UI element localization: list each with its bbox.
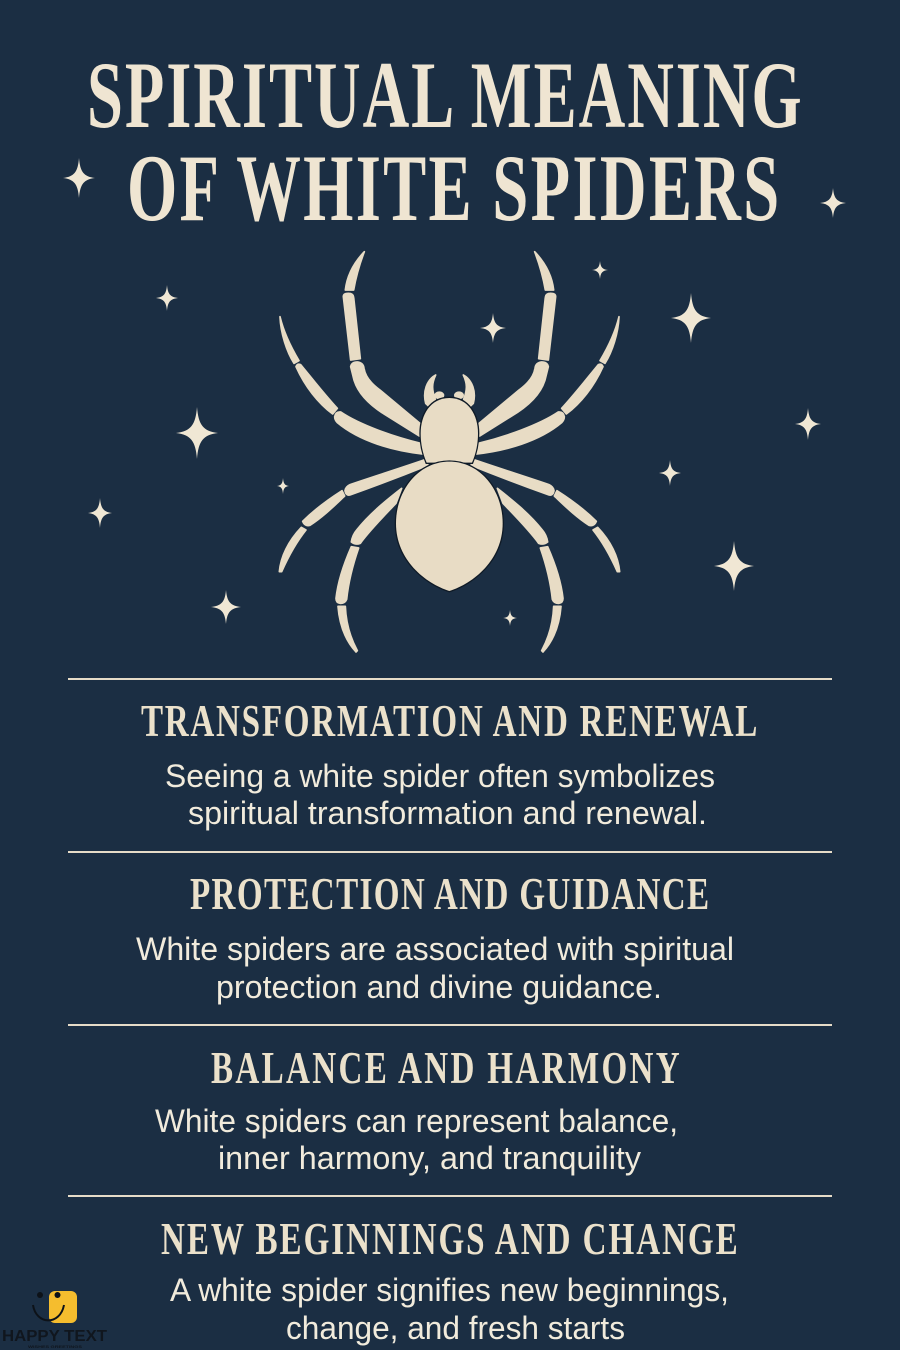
icon: sparkle stars [63,158,846,626]
section: new beginnings and change: change, and fresh starts [286,1310,625,1346]
section: balance and harmony: BALANCE AND HARMONY [211,1042,680,1093]
section: transformation and renewal [68,678,832,831]
logo: happy text: HAPPY TEXT [2,1328,107,1345]
section: balance and harmony: inner harmony, and tranquility [218,1140,641,1176]
title [87,43,802,241]
section: protection and guidance: protection and divine guidance. [216,969,662,1005]
section: protection and guidance [68,851,832,1005]
section: balance and harmony [68,1024,832,1176]
section: new beginnings and change [68,1195,832,1346]
logo: happy text [2,1291,107,1349]
section: new beginnings and change: NEW BEGINNINGS AND CHANGE [161,1213,738,1264]
section: protection and guidance: White spiders are associated with spiritual [136,931,734,967]
icon: white spider [279,252,620,652]
section: transformation and renewal: Seeing a white spider often symbolizes [165,758,715,794]
section: balance and harmony: White spiders can represent balance, [155,1103,678,1139]
logo: happy text: WISHES GREETINGS [28,1344,82,1349]
section: transformation and renewal: TRANSFORMATION AND RENEWAL [141,695,757,746]
section: protection and guidance: PROTECTION AND GUIDANCE [190,868,709,919]
title: SPIRITUAL MEANING [87,43,802,148]
section: transformation and renewal: spiritual transformation and renewal. [188,795,707,831]
title: OF WHITE SPIDERS [127,136,779,241]
section: new beginnings and change: A white spider signifies new beginnings, [170,1272,729,1308]
